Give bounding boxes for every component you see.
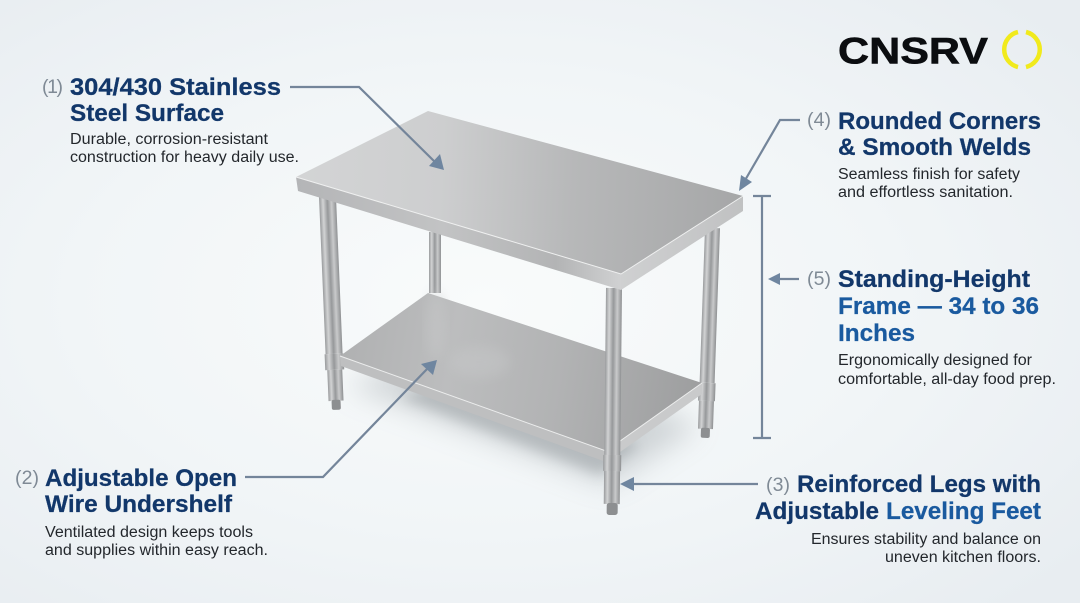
callout 1: stainless steel surface: Steel Surface <box>70 100 224 127</box>
callout 1: stainless steel surface: Durable, corrosion-resistant <box>70 131 269 148</box>
callout 4: corners <box>807 108 1041 201</box>
callout 1: stainless steel surface: (1) <box>42 76 63 98</box>
right leg <box>697 228 721 438</box>
callout 2: undershelf: Adjustable Open <box>45 465 237 492</box>
callout 5: height: Frame — 34 to 36 <box>838 293 1039 320</box>
arrow 5 <box>768 273 799 285</box>
back leg <box>429 232 441 293</box>
callout 4: corners: (4) <box>807 109 831 131</box>
arrow 1 <box>290 87 444 170</box>
callout 1: stainless steel surface: construction for heavy daily use. <box>70 149 299 166</box>
front leg <box>603 288 623 515</box>
table top <box>296 111 743 290</box>
callout 1: stainless steel surface <box>42 74 299 166</box>
logo: CNSRV: CNSRV <box>838 30 988 72</box>
callout 5: height: (5) <box>807 268 831 290</box>
callout 5: height: Standing-Height <box>838 266 1030 293</box>
floor shadow <box>345 340 700 485</box>
arrow 4 <box>739 120 800 191</box>
callout 2: undershelf <box>15 465 268 559</box>
callout 4: corners: Rounded Corners <box>838 108 1041 135</box>
callout 4: corners: & Smooth Welds <box>838 134 1031 161</box>
callout 5: height: Inches <box>838 320 915 347</box>
callout 2: undershelf: (2) <box>15 467 39 489</box>
callout 2: undershelf: and supplies within easy reach. <box>45 542 268 559</box>
logo: CNSRV <box>838 30 1040 72</box>
callout 4: corners: and effortless sanitation. <box>838 184 1013 201</box>
callout 2: undershelf: Wire Undershelf <box>45 491 233 518</box>
callout 3: legs <box>755 471 1041 566</box>
table illustration <box>296 111 743 515</box>
callout 3: legs: Reinforced Legs with <box>797 471 1041 498</box>
callout 3: legs: uneven kitchen floors. <box>885 549 1041 566</box>
callout 3: legs: (3) <box>766 474 790 496</box>
callout 3: legs: Leveling Feet <box>886 498 1041 525</box>
undershelf <box>340 291 702 462</box>
callout 1: stainless steel surface: 304/430 Stainless <box>70 74 281 101</box>
arrow 2 <box>245 360 437 477</box>
arrow 3 <box>620 477 758 491</box>
callout 4: corners: Seamless finish for safety <box>838 166 1020 183</box>
height bracket <box>753 196 771 438</box>
callout 2: undershelf: Ventilated design keeps tools <box>45 524 253 541</box>
callout 3: legs: Ensures stability and balance on <box>811 531 1041 548</box>
callout 5: height <box>807 266 1056 388</box>
left leg <box>318 197 346 410</box>
callout 5: height: comfortable, all-day food prep. <box>838 371 1056 388</box>
callout 5: height: Ergonomically designed for <box>838 352 1032 369</box>
callout 3: legs: Adjustable <box>755 498 879 525</box>
